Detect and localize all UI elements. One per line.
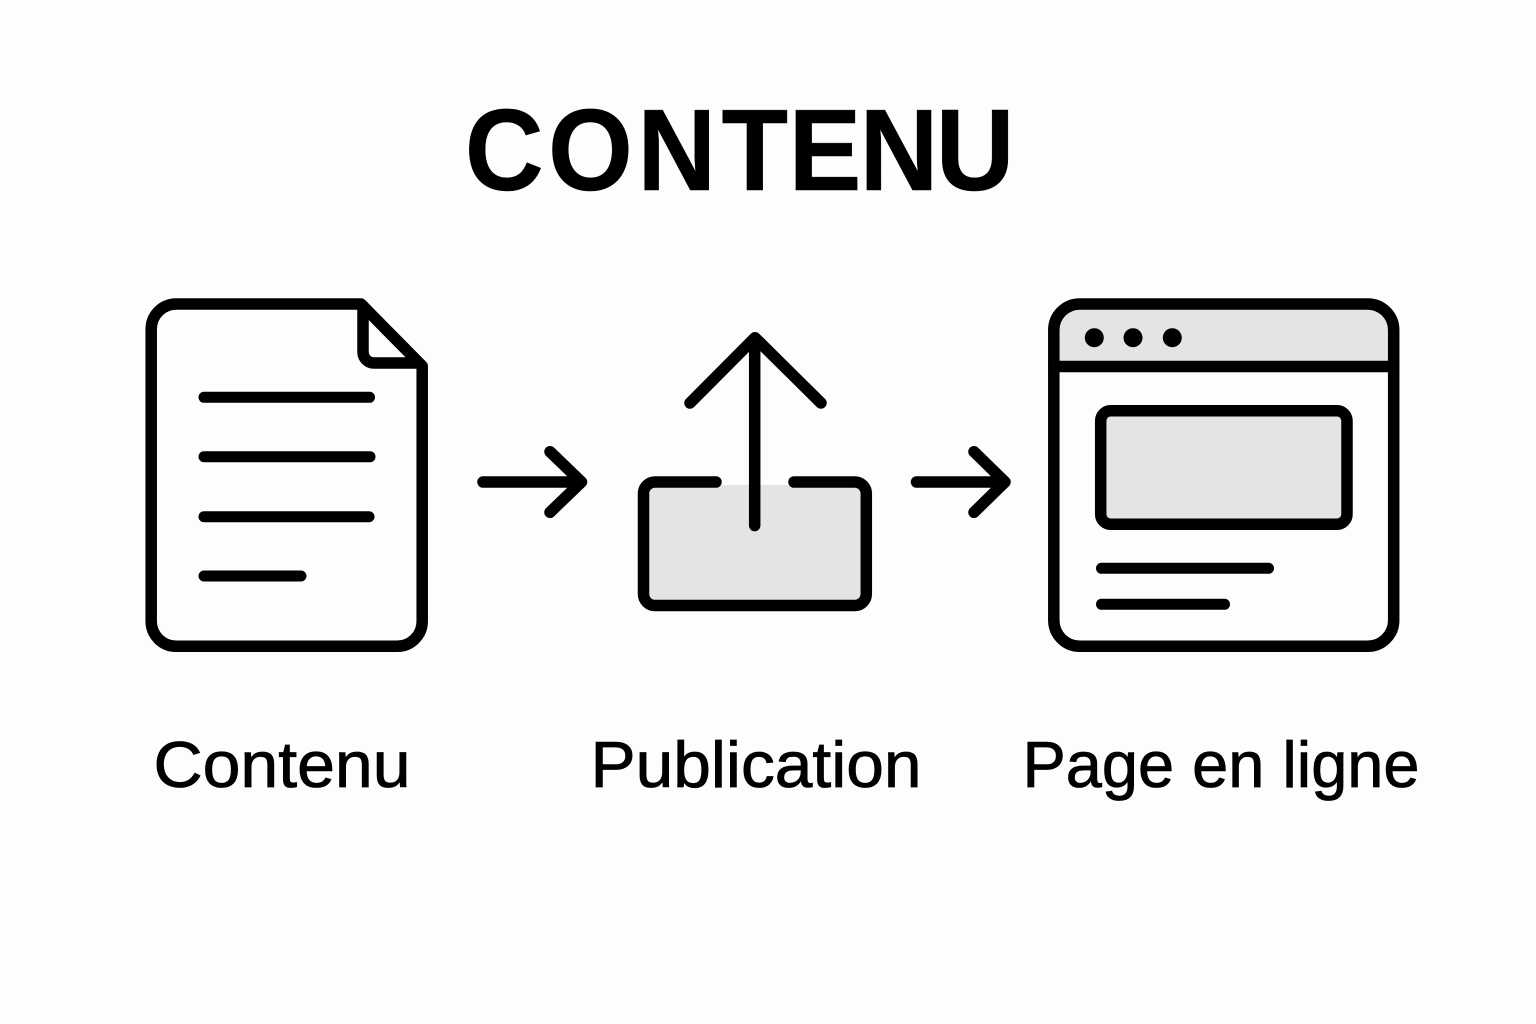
icon: publication upload bbox=[644, 338, 866, 606]
icon: web page browser bbox=[1054, 304, 1394, 646]
title: CONTENU bbox=[465, 85, 1015, 215]
label: Page en ligne: Page en ligne bbox=[1022, 728, 1420, 801]
label: Publication: Publication bbox=[590, 728, 922, 801]
label: Contenu: Contenu bbox=[154, 728, 410, 801]
icon: document bbox=[151, 304, 422, 646]
arrow: document to publication bbox=[483, 452, 582, 512]
arrow: publication to page bbox=[916, 452, 1005, 512]
